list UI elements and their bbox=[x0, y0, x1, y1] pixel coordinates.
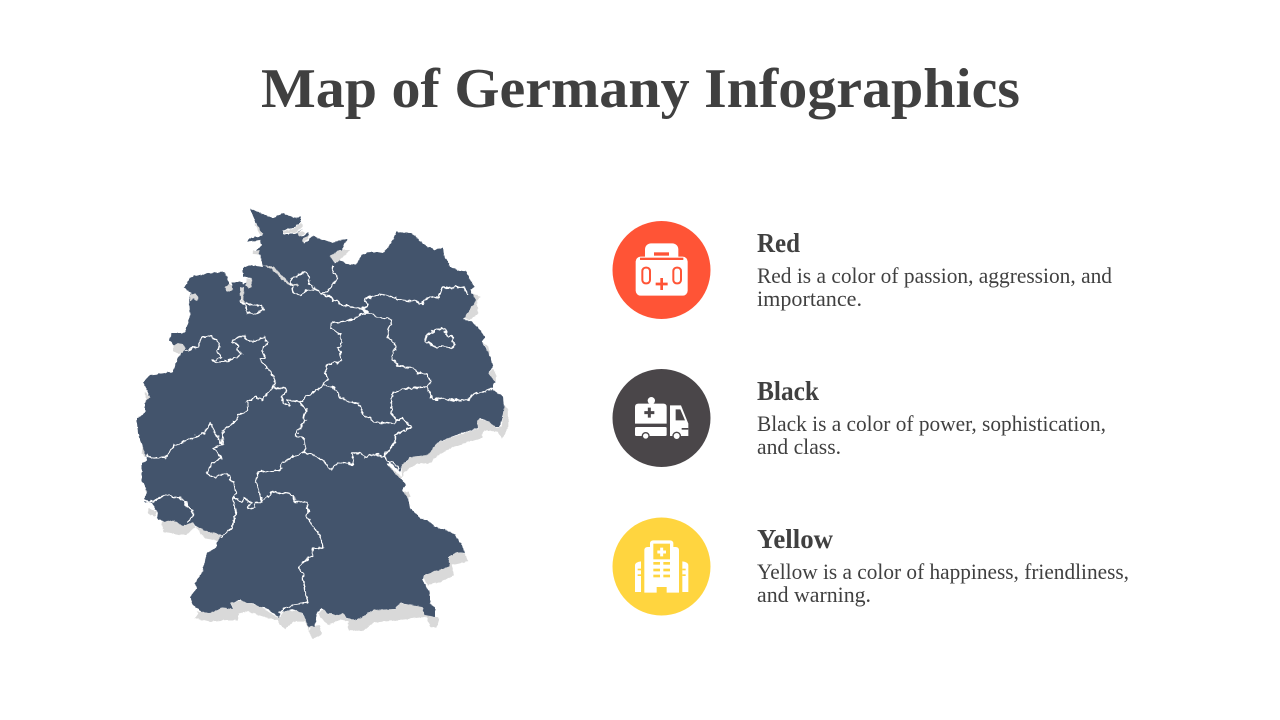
text: yellow description bbox=[757, 559, 1129, 607]
text: black description: Black is a color of power, sophistication, bbox=[757, 411, 1106, 436]
heading: red: Red bbox=[757, 228, 800, 258]
title: Map of Germany Infographics bbox=[261, 58, 1020, 120]
text: yellow description: and warning. bbox=[757, 582, 871, 607]
icon: red first aid kit bbox=[612, 221, 710, 319]
text: yellow description: Yellow is a color of happiness, friendliness, bbox=[757, 559, 1129, 584]
text: red description: Red is a color of passion, aggression, and bbox=[757, 263, 1112, 288]
icon: ambulance bbox=[612, 369, 710, 467]
text: red description: importance. bbox=[757, 286, 862, 311]
item: black bbox=[612, 369, 1106, 467]
text: black description bbox=[757, 411, 1106, 459]
map of Germany bbox=[137, 209, 508, 639]
item: yellow bbox=[612, 518, 1129, 616]
heading: black: Black bbox=[757, 376, 819, 406]
heading: yellow: Yellow bbox=[757, 524, 833, 554]
text: black description: and class. bbox=[757, 434, 841, 459]
text: red description bbox=[757, 263, 1112, 311]
item: red bbox=[612, 221, 1112, 319]
icon: hospital bbox=[612, 518, 710, 616]
